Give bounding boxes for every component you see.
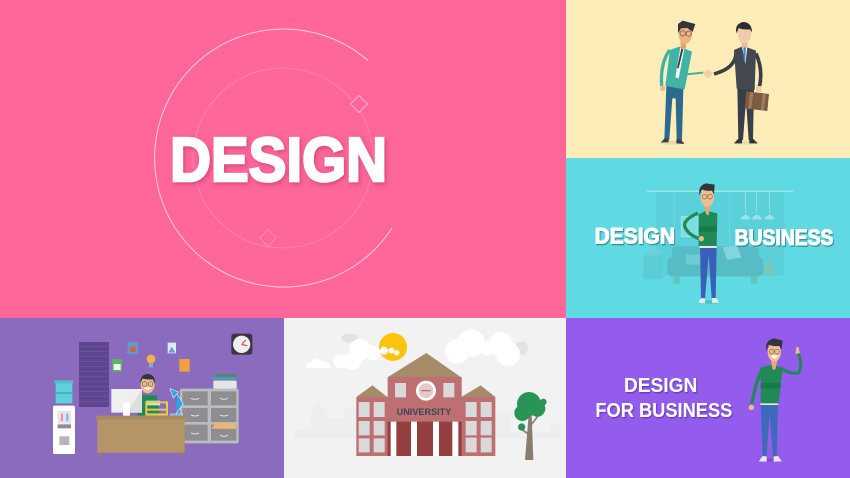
filing cabinets	[180, 374, 239, 443]
inner circle	[193, 68, 373, 248]
clouds	[305, 329, 528, 370]
wooden desk	[96, 416, 186, 456]
figure: waving man	[749, 338, 801, 462]
heading: DESIGN: DESIGN	[595, 224, 675, 249]
panel: pink design title	[0, 0, 566, 318]
window blinds	[79, 342, 109, 407]
label: UNIVERSITY: UNIVERSITY	[397, 407, 451, 417]
wall clock	[231, 334, 252, 355]
heading: FOR BUSINESS: FOR BUSINESS	[595, 400, 732, 422]
panel: design and business	[566, 158, 850, 318]
tree	[514, 392, 547, 460]
panel: university	[284, 318, 567, 478]
panel: handshake	[566, 0, 850, 158]
figure: man in teal jacket	[660, 21, 703, 145]
diamond outline bottom	[260, 230, 276, 246]
panel: design for business	[566, 318, 850, 478]
sun	[379, 333, 407, 361]
computer monitor	[111, 389, 142, 416]
water cooler	[53, 380, 75, 454]
diamond outline top	[351, 96, 367, 112]
room background	[643, 191, 793, 284]
figure: man in dark suit with briefcase	[704, 22, 769, 145]
heading: BUSINESS: BUSINESS	[735, 225, 833, 250]
skyline background	[294, 401, 561, 439]
heading: DESIGN: DESIGN	[170, 126, 387, 195]
panel: office	[0, 318, 284, 478]
office worker	[137, 374, 160, 415]
outer circle arc	[155, 29, 392, 287]
university building	[356, 353, 495, 456]
document tray	[145, 401, 168, 416]
figure: man in green sweater	[685, 183, 720, 304]
desk lamp	[170, 389, 183, 416]
heading: DESIGN: DESIGN	[624, 375, 697, 397]
wall icons: files and light bulb	[112, 342, 190, 372]
